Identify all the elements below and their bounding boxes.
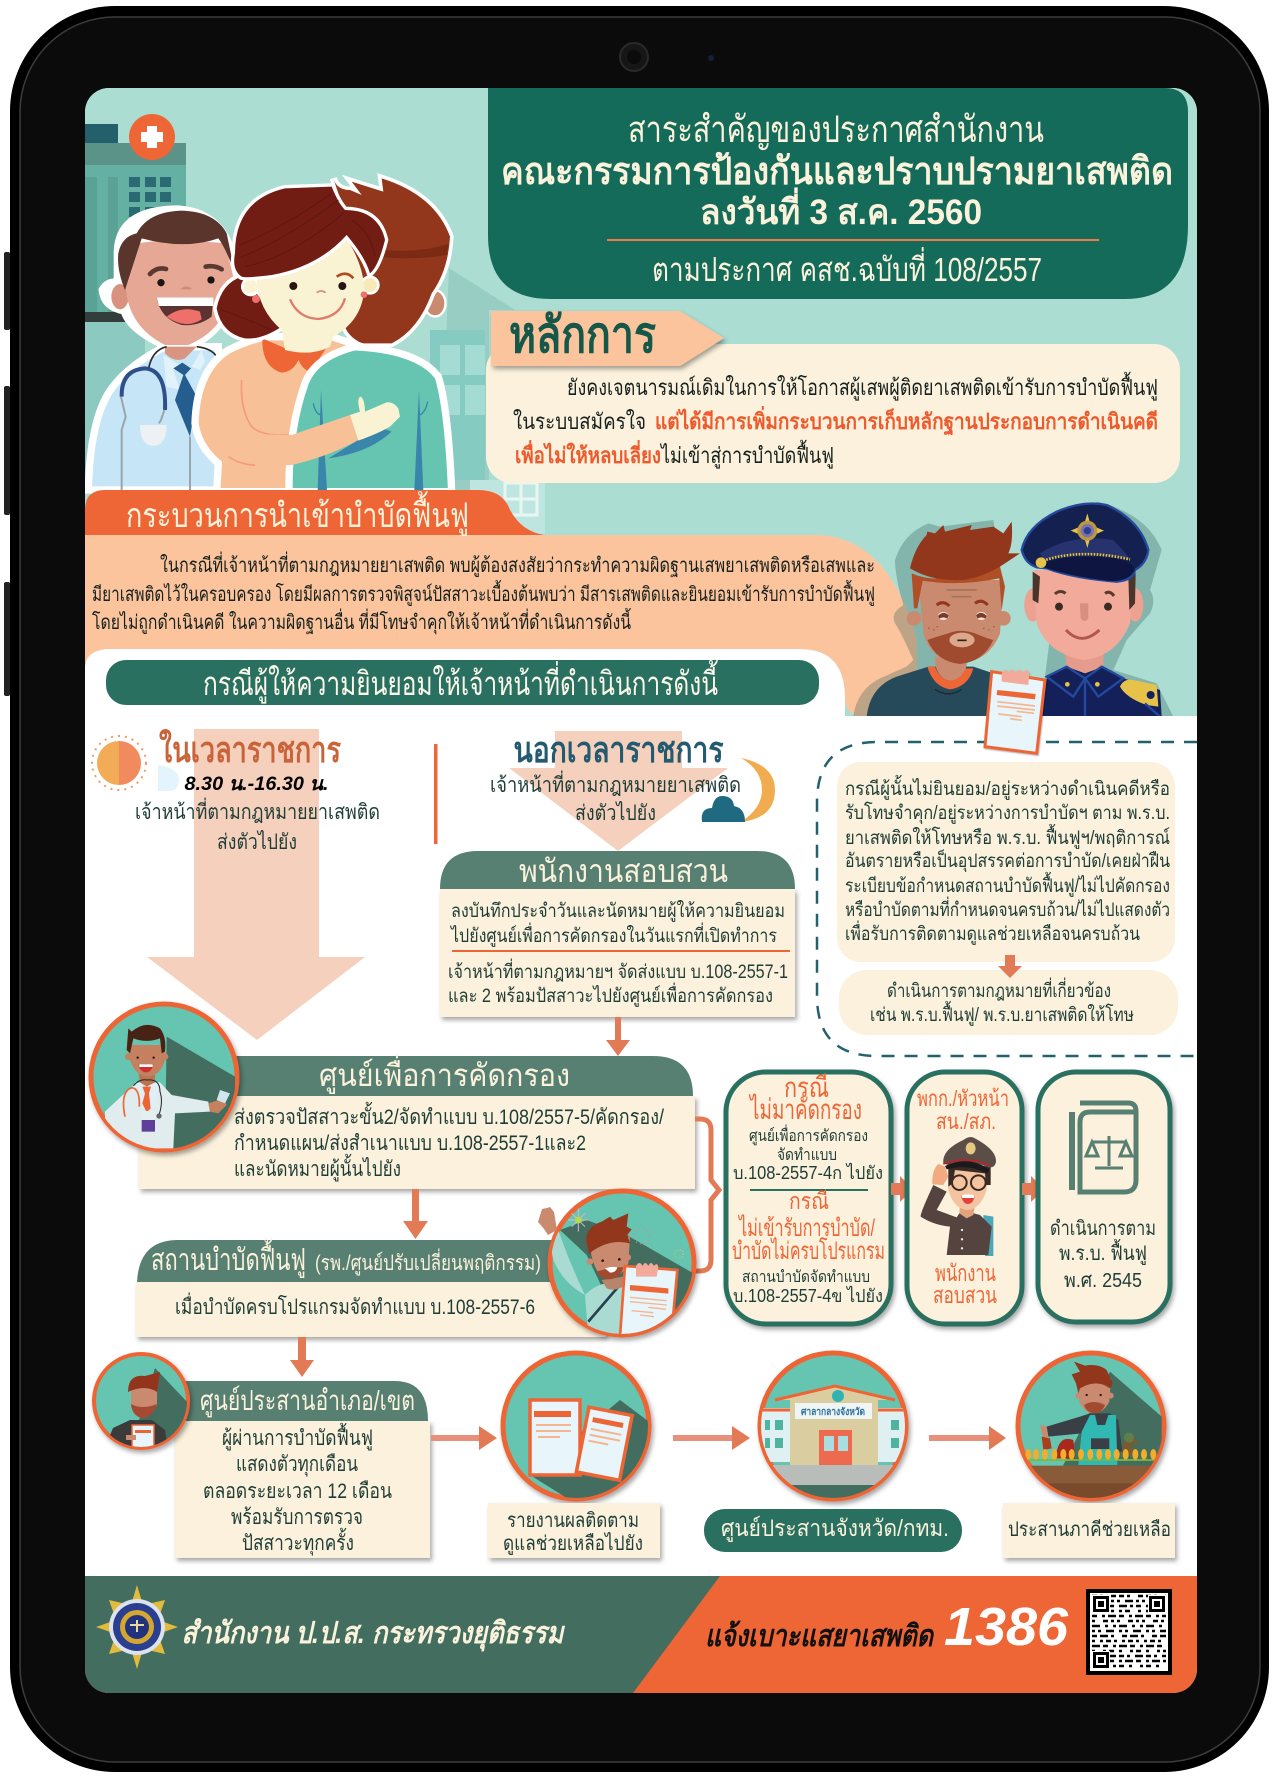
panel: district coordination: แสดงตัวทุกเดือน <box>236 1453 358 1477</box>
hotline number: 1386 <box>944 1597 1069 1657</box>
card: police officer: สอบสวน <box>933 1282 997 1308</box>
card: did not attend <box>726 1072 891 1324</box>
report label: รายงานผลติดตาม <box>507 1510 639 1532</box>
follow-up text box <box>839 970 1178 1035</box>
principle text: ไม่เข้าสู่การบำบัดฟื้นฟู <box>659 440 834 469</box>
principle text: เพื่อไม่ให้หลบเลี่ยง <box>515 439 661 468</box>
card: did not attend: บำบัดไม่ครบโปรแกรม <box>732 1237 885 1265</box>
police officer <box>1022 502 1173 717</box>
investigator text: เจ้าหน้าที่ตามกฎหมายฯ จัดส่งแบบ บ.108-2557-1 <box>448 958 788 983</box>
principle text <box>513 372 1158 469</box>
intro text: มียาเสพติดไว้ในครอบครอง โดยมีผลการตรวจพิสูจน์ปัสสาวะเบื้องต้นพบว่า มีสารเสพติดและยินยอมเข้ารับการบำบัดฟื้นฟู <box>92 580 875 607</box>
panel: investigator <box>440 851 795 1017</box>
woman head <box>217 187 385 353</box>
panel: treatment facility: สถานบำบัดฟื้นฟู <box>151 1238 306 1278</box>
arrow: report to province <box>673 1426 750 1450</box>
panel: district coordination: ผู้ผ่านการบำบัดฟื้นฟู <box>222 1423 373 1451</box>
investigator text: และ 2 พร้อมปัสสาวะไปยังศูนย์เพื่อการคัดกรอง <box>448 982 773 1007</box>
intro text: โดยไม่ถูกดำเนินคดี ในความผิดฐานอื่น ที่มีโทษจำคุกให้เจ้าหน้าที่ดำเนินการดังนี้ <box>92 608 631 635</box>
patient sweater <box>227 347 452 492</box>
investigator text <box>448 900 790 1007</box>
arrow: card to officer <box>891 1176 913 1202</box>
office hours text <box>135 728 380 854</box>
circle: man with report <box>94 1354 190 1451</box>
icon: clipboard <box>985 670 1045 753</box>
report label: ดูแลช่วยเหลือไปยัง <box>503 1532 643 1556</box>
bearded man <box>853 520 1020 717</box>
arrow: officer to law <box>1022 1176 1044 1202</box>
doctor <box>88 210 235 490</box>
icon: saluting officer <box>921 1137 996 1256</box>
panel: treatment facility: (รพ./ศูนย์ปรับเปลี่ยนพฤติกรรม) <box>315 1248 541 1276</box>
non-consent text box: รับโทษจำคุก/อยู่ระหว่างการบำบัดฯ ตาม พ.ร.บ. <box>845 801 1170 825</box>
icon: law book <box>1072 1103 1136 1192</box>
QR code <box>1086 1589 1172 1675</box>
panel: treatment facility: เมื่อบำบัดครบโปรแกรมจัดทำแบบ บ.108-2557-6 <box>175 1292 535 1319</box>
card: did not attend: กรณี <box>784 1072 829 1103</box>
province pill <box>704 1509 962 1552</box>
office hours text: ในเวลาราชการ <box>159 728 341 770</box>
woman body <box>195 337 362 492</box>
card: law action: ดำเนินการตาม <box>1050 1218 1156 1240</box>
arrow: treatment to coordination <box>290 1337 314 1377</box>
non-consent text box: ยาเสพติดให้โทษหรือ พ.ร.บ. ฟื้นฟูฯ/พฤติการณ์ <box>845 824 1170 849</box>
province pill: ศูนย์ประสานจังหวัด/กทม. <box>721 1515 949 1542</box>
follow-up text box: เช่น พ.ร.บ.ฟื้นฟู/ พ.ร.บ.ยาเสพติดให้โทษ <box>870 1001 1134 1026</box>
agency name: สำนักงาน ป.ป.ส. กระทรวงยุติธรรม <box>182 1617 565 1652</box>
background hospital building <box>85 124 545 535</box>
panel: district coordination: ศูนย์ประสานอำเภอ/เขต <box>200 1385 415 1418</box>
after hours text <box>492 740 740 820</box>
partners label <box>1003 1503 1175 1558</box>
panel: district coordination <box>175 1381 430 1558</box>
screen <box>85 88 1197 1693</box>
title line 2: คณะกรรมการป้องกันและปราบปรามยาเสพติด <box>501 151 1173 193</box>
office hours text: 8.30 น.-16.30 น. <box>184 774 328 795</box>
panel: screening centre: ส่งตรวจปัสสาวะขั้น2/จัดทำแบบ บ.108/2557-5/คัดกรอง/ <box>234 1102 664 1129</box>
non-consent text box: เพื่อรับการติดตามดูแลช่วยเหลือจนครบถ้วน <box>845 920 1140 945</box>
principle text: แต่ได้มีการเพิ่มกระบวนการเก็บหลักฐานประกอบการดำเนินคดี <box>655 405 1158 436</box>
office hours text: ส่งตัวไปยัง <box>217 830 297 854</box>
non-consent text box <box>837 762 1175 962</box>
white panel behind consent section <box>85 649 845 720</box>
illustration: doctor, woman and patient <box>88 178 452 492</box>
office hours text: เจ้าหน้าที่ตามกฎหมายยาเสพติด <box>135 797 380 824</box>
consent heading pill <box>106 660 819 705</box>
waving hand <box>538 1207 557 1235</box>
intro text: ในกรณีที่เจ้าหน้าที่ตามกฎหมายยาเสพติด พบผู้ต้องสงสัยว่ากระทำความผิดฐานเสพยาเสพติดหรือเสพและ <box>160 551 875 578</box>
arrow: to follow-up box <box>998 955 1022 978</box>
follow-up text box: ดำเนินการตามกฎหมายที่เกี่ยวข้อง <box>887 977 1111 1002</box>
panel: principle <box>486 307 1180 483</box>
peach band with intro text <box>85 490 917 716</box>
icon: moon and cloud <box>702 758 775 822</box>
investigator text: ลงบันทึกประจำวันและนัดหมายผู้ให้ความยินยอม <box>451 900 785 922</box>
illustration: bearded man and police officer <box>853 502 1173 717</box>
panel: screening centre: ศูนย์เพื่อการคัดกรอง <box>319 1054 570 1094</box>
panel: treatment facility <box>136 1238 606 1337</box>
arrow: screening to treatment <box>403 1189 428 1239</box>
panel: screening centre: และนัดหมายผู้นั้นไปยัง <box>234 1154 401 1182</box>
arrow: investigator to screening <box>606 1017 630 1056</box>
non-consent text box: ระเบียบข้อกำหนดสถานบำบัดฟื้นฟู/ไม่ไปคัดกรอง <box>845 872 1170 897</box>
circle: provincial hall: ศาลากลางจังหวัด <box>801 1406 865 1418</box>
big arrow: during office hours <box>147 729 365 1040</box>
footer <box>85 1576 1197 1693</box>
after hours text: เจ้าหน้าที่ตามกฎหมายยาเสพติด <box>490 770 741 797</box>
consent heading pill: กรณีผู้ให้ความยินยอมให้เจ้าหน้าที่ดำเนินการดังนี้ <box>203 660 719 704</box>
heading ribbon: process: กระบวนการนำเข้าบำบัดฟื้นฟู <box>126 491 469 536</box>
arrow: district to report <box>431 1426 497 1450</box>
card: law action: พ.ศ. 2545 <box>1064 1270 1142 1292</box>
circle: reports <box>503 1353 660 1500</box>
card: did not attend: กรณี <box>789 1188 829 1214</box>
card: did not attend: บ.108-2557-4ก ไปยัง <box>733 1162 883 1183</box>
title line 3: ลงวันที่ 3 ส.ค. 2560 <box>700 187 982 232</box>
card: did not attend: ไม่เข้ารับการบำบัด/ <box>738 1214 875 1242</box>
card: police officer: สน./สภ. <box>936 1109 996 1134</box>
card: law action: พ.ร.บ. ฟื้นฟู <box>1059 1239 1147 1266</box>
card: did not attend: สถานบำบัดจัดทำแบบ <box>742 1269 870 1286</box>
principle tag: หลักการ <box>509 307 656 363</box>
report label <box>488 1503 660 1558</box>
panel: district coordination: ปัสสาวะทุกครั้ง <box>242 1528 354 1556</box>
non-consent text box: อันตรายหรือเป็นอุปสรรคต่อการบำบัด/เคยฝ่าฝืน <box>845 848 1170 873</box>
panel: screening centre: กำหนดแผน/ส่งสำเนาแบบ บ.108-2557-1และ2 <box>234 1132 586 1155</box>
card: police officer <box>907 1072 1022 1324</box>
circle: man waving <box>538 1191 694 1337</box>
card: did not attend: ศูนย์เพื่อการคัดกรอง <box>749 1124 868 1146</box>
principle text: ในระบบสมัครใจ <box>513 409 646 434</box>
investigator text: ไปยังศูนย์เพื่อการคัดกรองในวันแรกที่เปิดทำการ <box>449 922 777 947</box>
icon: agency emblem <box>96 1585 178 1669</box>
small arrow: after office hours <box>509 731 728 851</box>
card: police officer: พกก./หัวหน้า <box>917 1086 1009 1111</box>
intro text <box>92 551 875 635</box>
hotline label: แจ้งเบาะแสยาเสพติด <box>705 1620 934 1653</box>
icon: sun <box>92 736 179 791</box>
bracket: outcomes <box>690 1119 719 1271</box>
panel: district coordination: พร้อมรับการตรวจ <box>231 1506 363 1529</box>
card: did not attend: จัดทำแบบ <box>777 1147 837 1164</box>
panel: screening centre <box>139 1054 695 1189</box>
card: police officer: พนักงาน <box>935 1260 996 1286</box>
card: did not attend: ไม่มาคัดกรอง <box>749 1094 862 1125</box>
partners label: ประสานภาคีช่วยเหลือ <box>1008 1519 1171 1541</box>
after hours text: นอกเวลาราชการ <box>514 729 724 770</box>
title panel <box>488 88 1188 299</box>
arrow: province to partners <box>929 1426 1006 1450</box>
patient hair <box>333 178 450 343</box>
icon: medical cross <box>129 114 175 160</box>
panel: non-consent dashed <box>817 742 1197 1056</box>
title line 4: ตามประกาศ คสช.ฉบับที่ 108/2557 <box>652 247 1042 288</box>
card: did not attend: บ.108-2557-4ข ไปยัง <box>733 1285 883 1306</box>
circle: doctor <box>91 1004 237 1150</box>
principle text: ยังคงเจตนารมณ์เดิมในการให้โอกาสผู้เสพผู้ติดยาเสพติดเข้ารับการบำบัดฟื้นฟู <box>567 372 1158 401</box>
non-consent text box: กรณีผู้นั้นไม่ยินยอม/อยู่ระหว่างดำเนินคดีหรือ <box>845 775 1170 800</box>
non-consent text box: หรือบำบัดตามที่กำหนดจนครบถ้วน/ไม่ไปแสดงตัว <box>845 896 1170 921</box>
after hours text: ส่งตัวไปยัง <box>575 801 656 825</box>
circle: provincial hall <box>760 1353 910 1505</box>
panel: investigator: พนักงานสอบสวน <box>519 853 728 889</box>
title line 1: สาระสำคัญของประกาศสำนักงาน <box>628 109 1044 151</box>
card: law action <box>1038 1072 1170 1322</box>
circle: farmer <box>1017 1353 1164 1502</box>
panel: district coordination: ตลอดระยะเวลา 12 เดือน <box>203 1480 392 1503</box>
